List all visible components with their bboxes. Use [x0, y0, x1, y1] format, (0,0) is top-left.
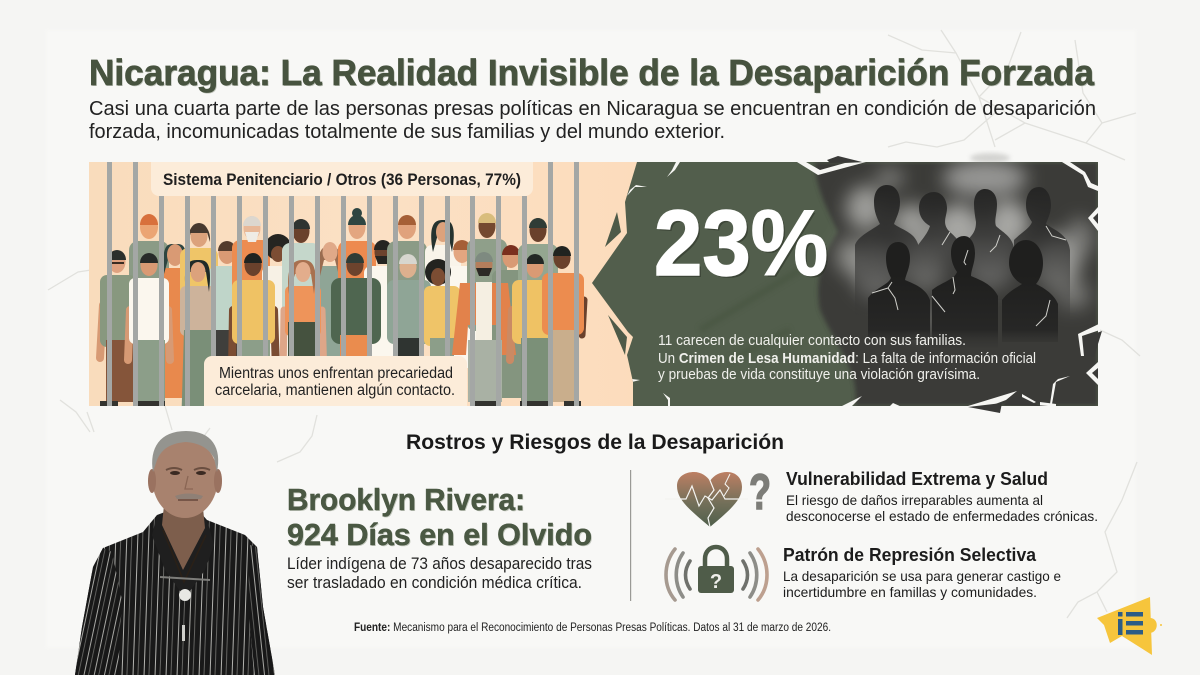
icon: broken heart with pulse — [665, 464, 771, 527]
torn edge shards — [605, 212, 627, 355]
text: extreme vulnerability — [786, 468, 1098, 524]
prison bars — [107, 162, 579, 406]
big number 23%: 23% — [656, 193, 830, 297]
icon: padlock with signal waves — [666, 547, 767, 600]
torn paper cracks — [627, 162, 1103, 408]
text: selective repression pattern — [783, 544, 1061, 600]
text: crime against humanity: y pruebas de vida constituye una violación gravísima. — [658, 366, 980, 383]
text: crime against humanity: Un Crimen de Lesa Humanidad: La falta de información oficial — [658, 350, 1036, 367]
crowd of people behind bars — [100, 208, 584, 430]
silhouette cracks — [872, 226, 1066, 326]
profile: Brooklyn Rivera — [287, 482, 593, 592]
caption: precarious conditions: carcelaria, mantienen algún contacto. — [215, 382, 455, 399]
smoke — [836, 160, 1094, 334]
label: prison system — [151, 162, 533, 196]
profile: Brooklyn Rivera: Líder indígena de 73 años desaparecido tras — [287, 555, 592, 573]
front silhouettes — [868, 236, 1058, 348]
text: crime against humanity: 11 carecen de cualquier contacto con sus familias. — [658, 332, 966, 349]
big number 23%: 23% — [654, 191, 828, 295]
caption: precarious conditions — [204, 356, 467, 406]
heading: faces and risks: Rostros y Riesgos de la Desaparición — [406, 430, 784, 454]
subtitle — [89, 98, 1096, 143]
profile: Brooklyn Rivera: Brooklyn Rivera: — [287, 482, 525, 517]
text: extreme vulnerability: Vulnerabilidad Extrema y Salud — [786, 468, 1048, 489]
text: selective repression pattern: La desaparición se usa para generar castigo e — [783, 568, 1061, 584]
text: selective repression pattern: incertidumbre en famillas y comunidades. — [783, 584, 1037, 600]
text: selective repression pattern: Patrón de Represión Selectiva — [783, 544, 1037, 565]
profile: Brooklyn Rivera: ser trasladado en condición médica crítica. — [287, 574, 582, 592]
title: Nicaragua: La Realidad Invisible de la Desaparición Forzada — [89, 52, 1095, 93]
title: Nicaragua: La Realidad Invisible de la Desaparición Forzada — [90, 53, 1096, 94]
profile: Brooklyn Rivera: Brooklyn Rivera: — [288, 483, 526, 518]
panel: forced disappearance — [592, 156, 1103, 413]
source note: Fuente: Mecanismo para el Reconocimiento de Personas Presas Políticas. Datos al 31 de marzo de 2026. — [354, 622, 831, 634]
icon: broken heart with pulse: ? — [749, 464, 771, 520]
text: extreme vulnerability: El riesgo de daños irreparables aumenta al — [786, 492, 1043, 508]
front row — [96, 302, 105, 362]
text: extreme vulnerability: desconocerse el estado de enfermedades crónicas. — [786, 508, 1098, 524]
photo: Brooklyn Rivera — [75, 431, 275, 675]
profile: Brooklyn Rivera: 924 Días en el Olvido — [288, 518, 593, 553]
text: crime against humanity — [658, 332, 1036, 383]
panel: system prison people — [89, 162, 637, 406]
shards outside panel — [827, 156, 1102, 413]
back silhouettes — [855, 185, 1070, 320]
logo: yellow megaphone — [1097, 597, 1162, 655]
subtitle: Casi una cuarta parte de las personas presas políticas en Nicaragua se encuentran en condición de desaparición — [89, 98, 1096, 120]
subtitle: forzada, incomunicadas totalmente de sus familias y del mundo exterior. — [89, 121, 725, 143]
caption: precarious conditions: Mientras unos enfrentan precariedad — [219, 365, 453, 382]
icon: padlock with signal waves: ? — [710, 571, 722, 593]
profile: Brooklyn Rivera: 924 Días en el Olvido — [287, 517, 592, 552]
label: prison system: Sistema Penitenciario / Otros (36 Personas, 77%) — [163, 171, 521, 189]
